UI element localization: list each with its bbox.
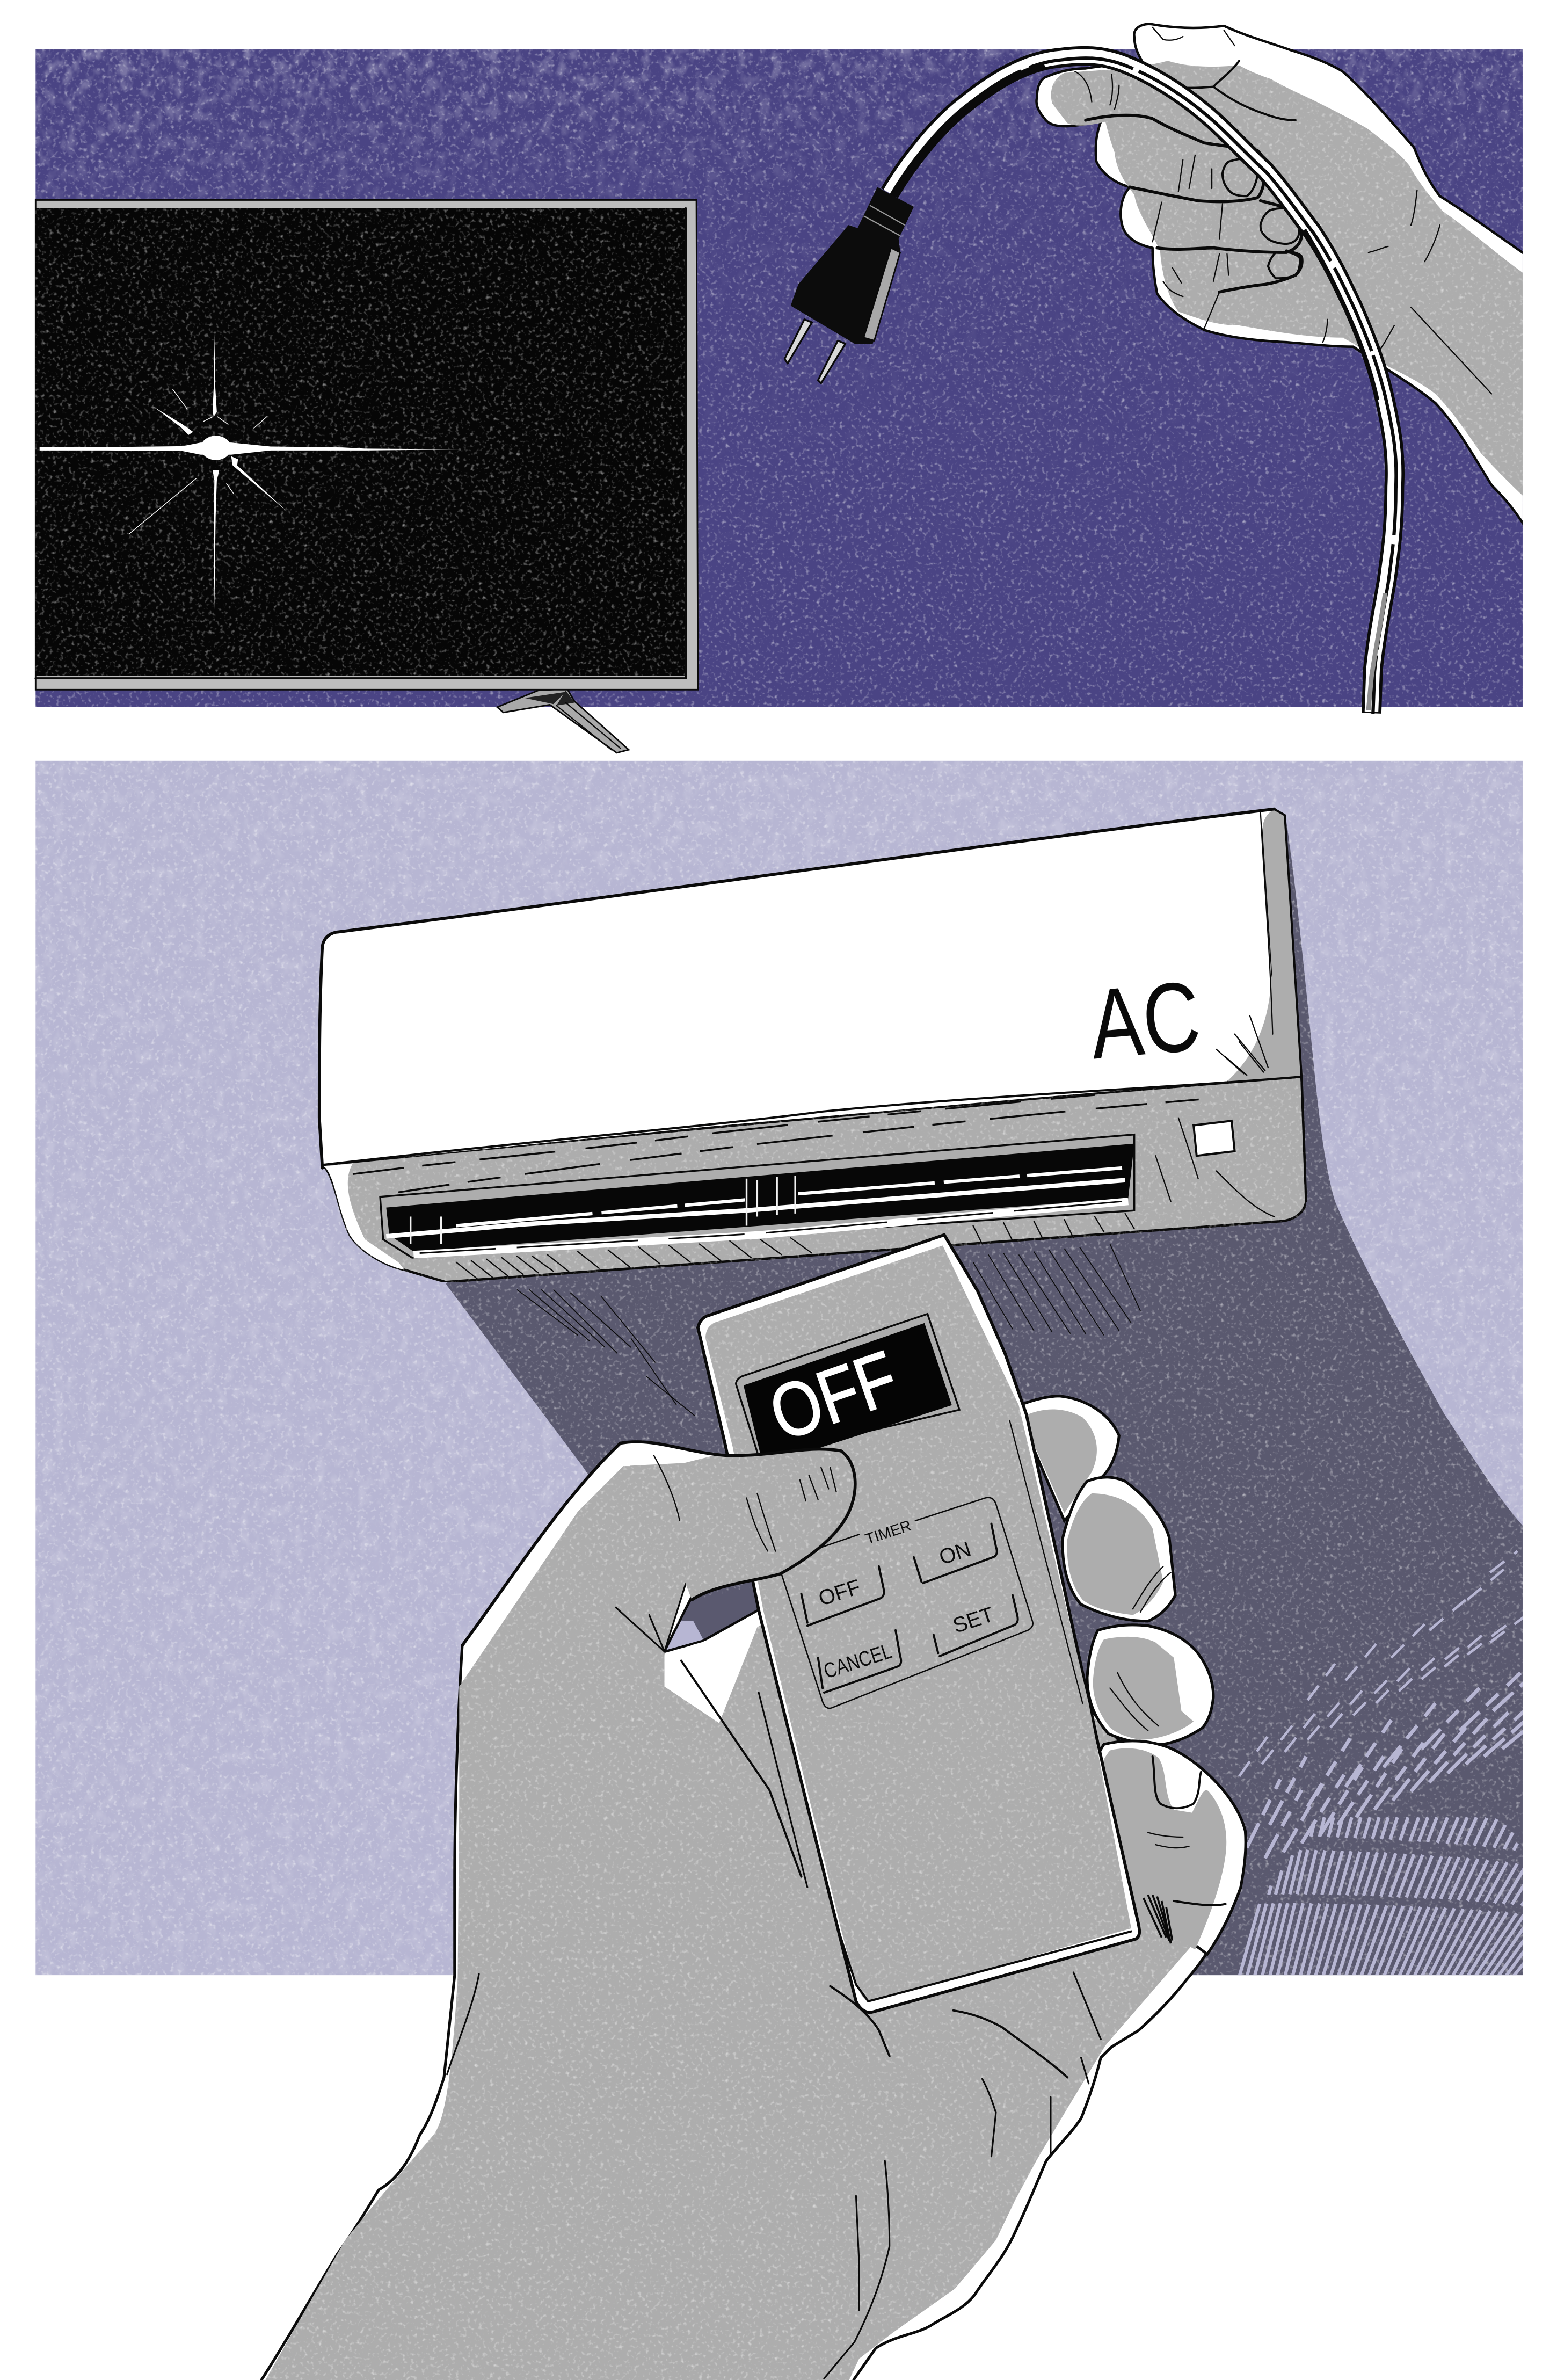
- timer label: TIMER: [863, 1516, 913, 1548]
- thumb tip hatching: [654, 1455, 836, 1551]
- ac white louvers: [386, 1168, 1128, 1254]
- hand grey fill: [1051, 61, 1533, 505]
- power cord: [890, 56, 1396, 714]
- remote control: [698, 1235, 1139, 2012]
- palm silhouette: [258, 1443, 1241, 2380]
- button: set: [934, 1595, 1018, 1656]
- button: off: [801, 1566, 884, 1626]
- finger: third: [1087, 1625, 1213, 1744]
- thumb outline: [462, 1442, 855, 1645]
- finger: lower large: [1091, 1741, 1246, 1954]
- gap through thumb crook: [665, 1586, 757, 1651]
- ac vent recess: [380, 1135, 1134, 1258]
- thumb: [462, 1442, 855, 1645]
- air conditioner unit: [319, 809, 1306, 1282]
- plug prongs: [784, 320, 846, 383]
- finger outlines: [1075, 27, 1491, 394]
- remote lower edge: [838, 1928, 1131, 2001]
- top hand holding cord: [1036, 24, 1536, 545]
- holding hand: [258, 1396, 1246, 2380]
- timer button panel: [780, 1498, 1033, 1708]
- button: off: OFF: [816, 1575, 863, 1610]
- bezel inner line: [35, 208, 686, 678]
- ac right side cap: [1226, 809, 1301, 1083]
- remote body edge: [698, 1235, 1139, 2012]
- ac label: AC: [1086, 961, 1204, 1080]
- lavender gap: [665, 1621, 704, 1651]
- palm creases: [681, 1660, 1067, 2077]
- ac white front cover: [319, 809, 1274, 1165]
- white patch beside palm notch: [665, 1641, 731, 1723]
- ac outlines: [319, 809, 1274, 1168]
- television: [35, 200, 698, 753]
- ac body ink dashes: [353, 1095, 1217, 1206]
- panel: purple background: [35, 49, 1523, 707]
- remote side line: [1009, 1420, 1082, 1703]
- air conditioner shadow on wall: [446, 821, 1530, 1980]
- palm grey fill: [265, 1466, 1232, 2380]
- remote display: [736, 1314, 959, 1466]
- ink strokes under unit: [517, 1244, 1140, 1416]
- remote face: [705, 1245, 1131, 2001]
- shadow hatching: [1239, 1551, 1530, 1977]
- button: on: ON: [936, 1537, 974, 1570]
- tv black screen: [35, 208, 686, 676]
- button: cancel: CANCEL: [821, 1639, 894, 1684]
- ac black slot: [386, 1144, 1134, 1252]
- ac bottom hatch: [456, 1118, 1274, 1279]
- thumb top rim: [620, 1442, 715, 1466]
- button: on: [914, 1524, 997, 1583]
- tv frame: [35, 200, 698, 690]
- hand silhouette: [1036, 24, 1536, 545]
- finger: second: [1063, 1477, 1175, 1621]
- panel: lavender background: [35, 761, 1523, 1975]
- ac sensor window: [1194, 1121, 1235, 1156]
- icon: screen crack: [40, 333, 467, 610]
- finger: upper: [1016, 1396, 1119, 1521]
- icon: electrical plug: [784, 187, 914, 383]
- ac lower grey body: [322, 1077, 1306, 1282]
- ac white left corner: [324, 1163, 404, 1270]
- icon: tv stand: [497, 689, 629, 753]
- crook outline: [665, 1597, 757, 1651]
- plug neck and body: [791, 187, 914, 344]
- display label: OFF: [760, 1335, 908, 1457]
- button: set: SET: [950, 1602, 996, 1638]
